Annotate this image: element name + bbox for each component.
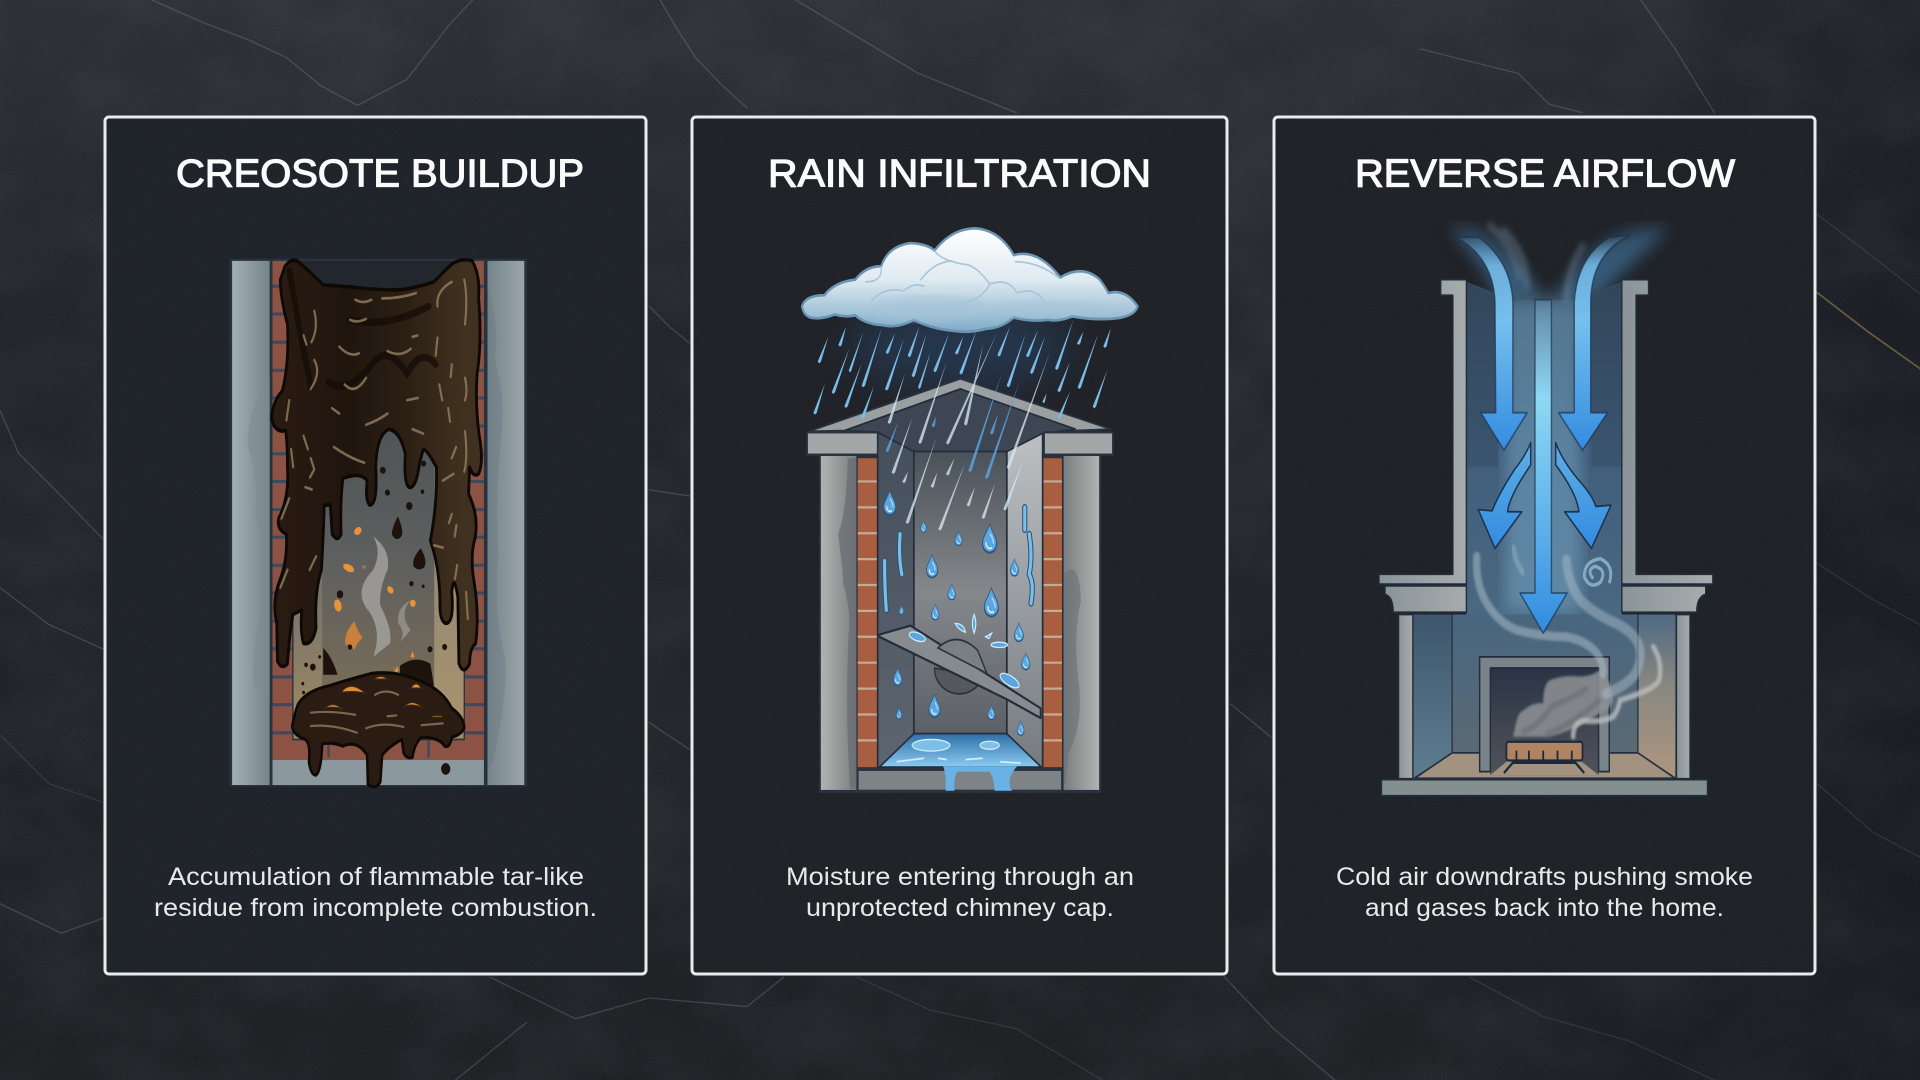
panel: creosote buildup: [105, 117, 646, 974]
falling soot drops: [301, 460, 450, 775]
brick liner: [858, 458, 1062, 767]
illustration: rain entering uncapped chimney: [802, 228, 1138, 793]
chimney cap roof: [807, 379, 1113, 455]
dark folds in tar: [289, 271, 436, 387]
pale streaks crossing cap: [888, 333, 1050, 531]
description: creosote: Accumulation of flammable tar-like: [168, 863, 584, 891]
top air glow: [1449, 228, 1670, 302]
smoke plume: [1477, 224, 1660, 737]
water drops: [883, 490, 1030, 736]
arrow: right downdraft: [1559, 235, 1631, 450]
chimney walls: [819, 454, 1101, 793]
embers: [333, 525, 416, 673]
creosote tar sheet: [271, 260, 481, 670]
tar pile with embers: [292, 673, 464, 787]
flue interior: [1466, 282, 1622, 614]
water running down walls: [885, 507, 1032, 610]
rain glow behind streaks: [850, 300, 1070, 390]
open flue top: [300, 261, 461, 306]
description: creosote: residue from incomplete combustion.: [154, 894, 597, 922]
rain streaks: [813, 320, 1111, 531]
arrow: left downdraft: [1456, 237, 1527, 450]
description: reverse airflow: Cold air downdrafts pushing smoke: [1336, 863, 1753, 891]
tar highlights: [280, 280, 468, 619]
fireplace interior: [1413, 614, 1675, 779]
flue interior: [878, 432, 1043, 767]
heading: reverse airflow: REVERSE AIRFLOW: [1355, 152, 1735, 196]
flue interior: [293, 396, 464, 739]
arrow: right branch: [1556, 443, 1611, 548]
fire grate and log: [1504, 742, 1584, 773]
cap damper plate: [879, 614, 1041, 718]
brick liner: [272, 261, 484, 760]
smoke wisps: [362, 536, 411, 657]
chimney and mantel masonry: [1379, 280, 1713, 796]
description: rain: unprotected chimney cap.: [806, 894, 1114, 922]
arrow: left branch: [1478, 443, 1531, 548]
panel: rain infiltration: [692, 117, 1227, 974]
heading: creosote buildup: CREOSOTE BUILDUP: [176, 152, 584, 196]
storm cloud: [802, 228, 1138, 332]
panel: reverse airflow: [1274, 117, 1815, 974]
arrow: central downdraft: [1520, 300, 1567, 633]
streaks above cap: [813, 320, 1111, 419]
illustration: creosote-coated chimney flue: [229, 259, 527, 787]
illustration: downdraft into fireplace: [1379, 224, 1713, 796]
heading: rain infiltration: RAIN INFILTRATION: [768, 152, 1151, 196]
description: reverse airflow: and gases back into the home.: [1365, 894, 1724, 922]
description: rain: Moisture entering through an: [786, 863, 1134, 891]
blue streaks inside flue: [886, 373, 1020, 479]
sill with drains: [858, 766, 1062, 791]
